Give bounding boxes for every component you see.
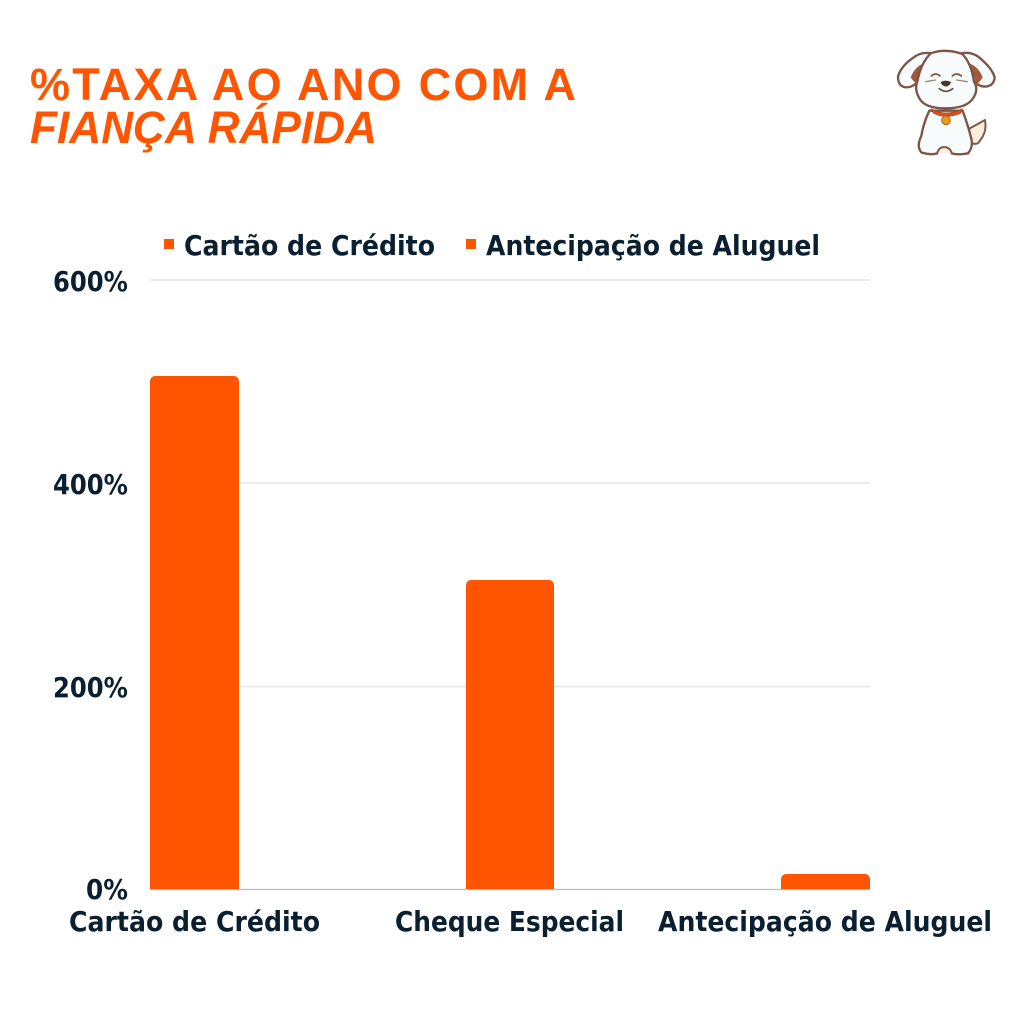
bar: Antecipação de Aluguel bbox=[781, 874, 870, 889]
title: %TAXA AO ANO COM A bbox=[30, 59, 576, 110]
legend bbox=[164, 229, 820, 262]
icon: smiling puppy mascot bbox=[898, 51, 995, 154]
x axis labels: Cartão de Crédito bbox=[69, 905, 320, 938]
title: FIANÇA RÁPIDA bbox=[30, 102, 377, 153]
bar: Cartão de Crédito bbox=[150, 376, 239, 889]
title bbox=[30, 59, 576, 153]
y axis labels: 0% bbox=[86, 873, 128, 906]
x axis labels: Antecipação de Aluguel bbox=[658, 905, 992, 938]
y axis labels: 200% bbox=[53, 671, 128, 704]
bar chart bbox=[53, 265, 992, 938]
y axis labels: 400% bbox=[53, 468, 128, 501]
x axis labels: Cheque Especial bbox=[395, 905, 624, 938]
x axis labels bbox=[69, 905, 992, 938]
y axis labels: 600% bbox=[53, 265, 128, 298]
legend item: Cartão de Crédito: Cartão de Crédito bbox=[184, 229, 435, 262]
y axis labels bbox=[53, 265, 128, 906]
legend item: Antecipação de Aluguel: Antecipação de Aluguel bbox=[486, 229, 820, 262]
bar: Cheque Especial bbox=[466, 580, 554, 889]
